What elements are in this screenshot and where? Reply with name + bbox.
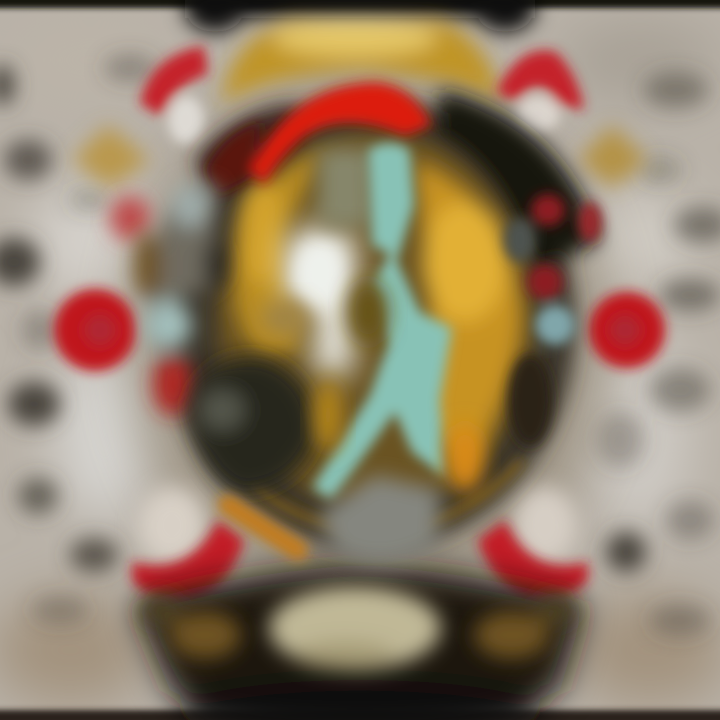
red circle left [54,289,136,371]
central white shape [285,226,355,376]
teal figure [312,142,452,500]
red circle right [589,292,665,368]
orange right accent [447,424,483,492]
gold accent left-center [261,300,309,336]
right bright gold [415,160,522,470]
dark sphere [190,357,315,492]
base gold accents [140,594,576,659]
top edge shadow [0,0,720,8]
brown inner shading [217,130,533,510]
top black crest [185,0,535,32]
right ring mosaic [504,194,602,446]
outer halo behind the emblem [128,70,608,610]
left ring mosaic [134,183,227,415]
central brown accent [348,280,388,344]
outer dark ring [165,90,600,550]
red arch [205,82,432,195]
central gray figure top [318,148,372,228]
top side ornaments: red [140,46,584,144]
bottom edge shadow [0,710,720,720]
base cream plaque [269,586,441,670]
orange sash [228,505,298,550]
left gold [232,150,325,355]
gray rock bottom [318,475,440,563]
small red dot left [110,196,150,240]
lower crescents: red [138,487,577,563]
gold crown arc [222,20,502,105]
central white core [294,245,342,305]
lower crescent strokes [132,520,588,600]
bottom dark base [135,565,585,720]
gold highlight lower center [314,379,342,451]
gold side ornaments [72,125,648,188]
gold ring edge [252,455,528,532]
